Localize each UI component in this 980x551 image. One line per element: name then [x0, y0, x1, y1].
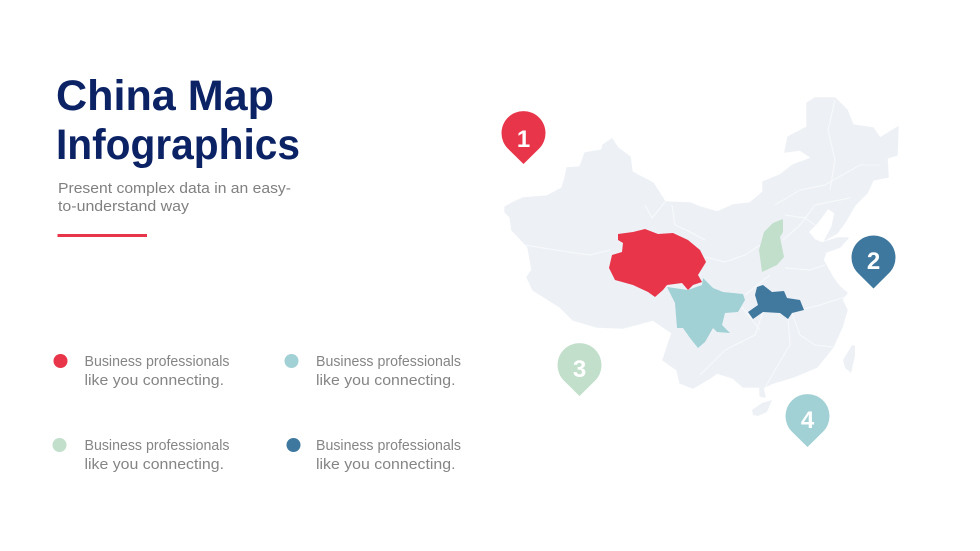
- legend item 3: [52, 438, 230, 473]
- Shanxi region: [759, 219, 784, 272]
- Hainan island: [752, 400, 772, 416]
- mainland base: [505, 98, 898, 397]
- pin 2: [852, 235, 895, 288]
- title: China Map: [56, 72, 274, 120]
- Sichuan region: [667, 278, 745, 348]
- legend item 1: Business professionals: [84, 354, 230, 370]
- pin 4: 4: [801, 407, 815, 434]
- Taiwan island: [843, 345, 855, 373]
- legend item 3: like you connecting.: [84, 457, 224, 473]
- legend item 4: [286, 438, 461, 473]
- subtitle: Present complex data in an easy-: [58, 180, 291, 197]
- title: [56, 72, 300, 169]
- legend item 1: [54, 354, 230, 389]
- legend item 4: like you connecting.: [316, 457, 456, 473]
- pin 3: [558, 343, 602, 396]
- legend item 2: Business professionals: [316, 354, 461, 370]
- legend: [52, 354, 461, 473]
- pin 1: [502, 111, 546, 164]
- title: Infographics: [56, 121, 300, 169]
- pin 1: 1: [517, 126, 530, 153]
- map of China: [505, 98, 898, 416]
- accent rule: [58, 234, 147, 237]
- legend item 4: Business professionals: [316, 438, 461, 454]
- legend item 3: Business professionals: [84, 438, 230, 454]
- Hubei region: [748, 285, 804, 319]
- legend item 2: [284, 354, 461, 389]
- subtitle: to-understand way: [58, 198, 190, 215]
- Qinghai region: [609, 229, 706, 297]
- province borders: [525, 100, 880, 388]
- subtitle: [58, 180, 291, 215]
- pin 2: 2: [867, 248, 880, 275]
- legend item 1: like you connecting.: [84, 373, 224, 389]
- pin 3: 3: [573, 356, 586, 383]
- legend item 2: like you connecting.: [316, 373, 456, 389]
- pin 4: [785, 394, 830, 447]
